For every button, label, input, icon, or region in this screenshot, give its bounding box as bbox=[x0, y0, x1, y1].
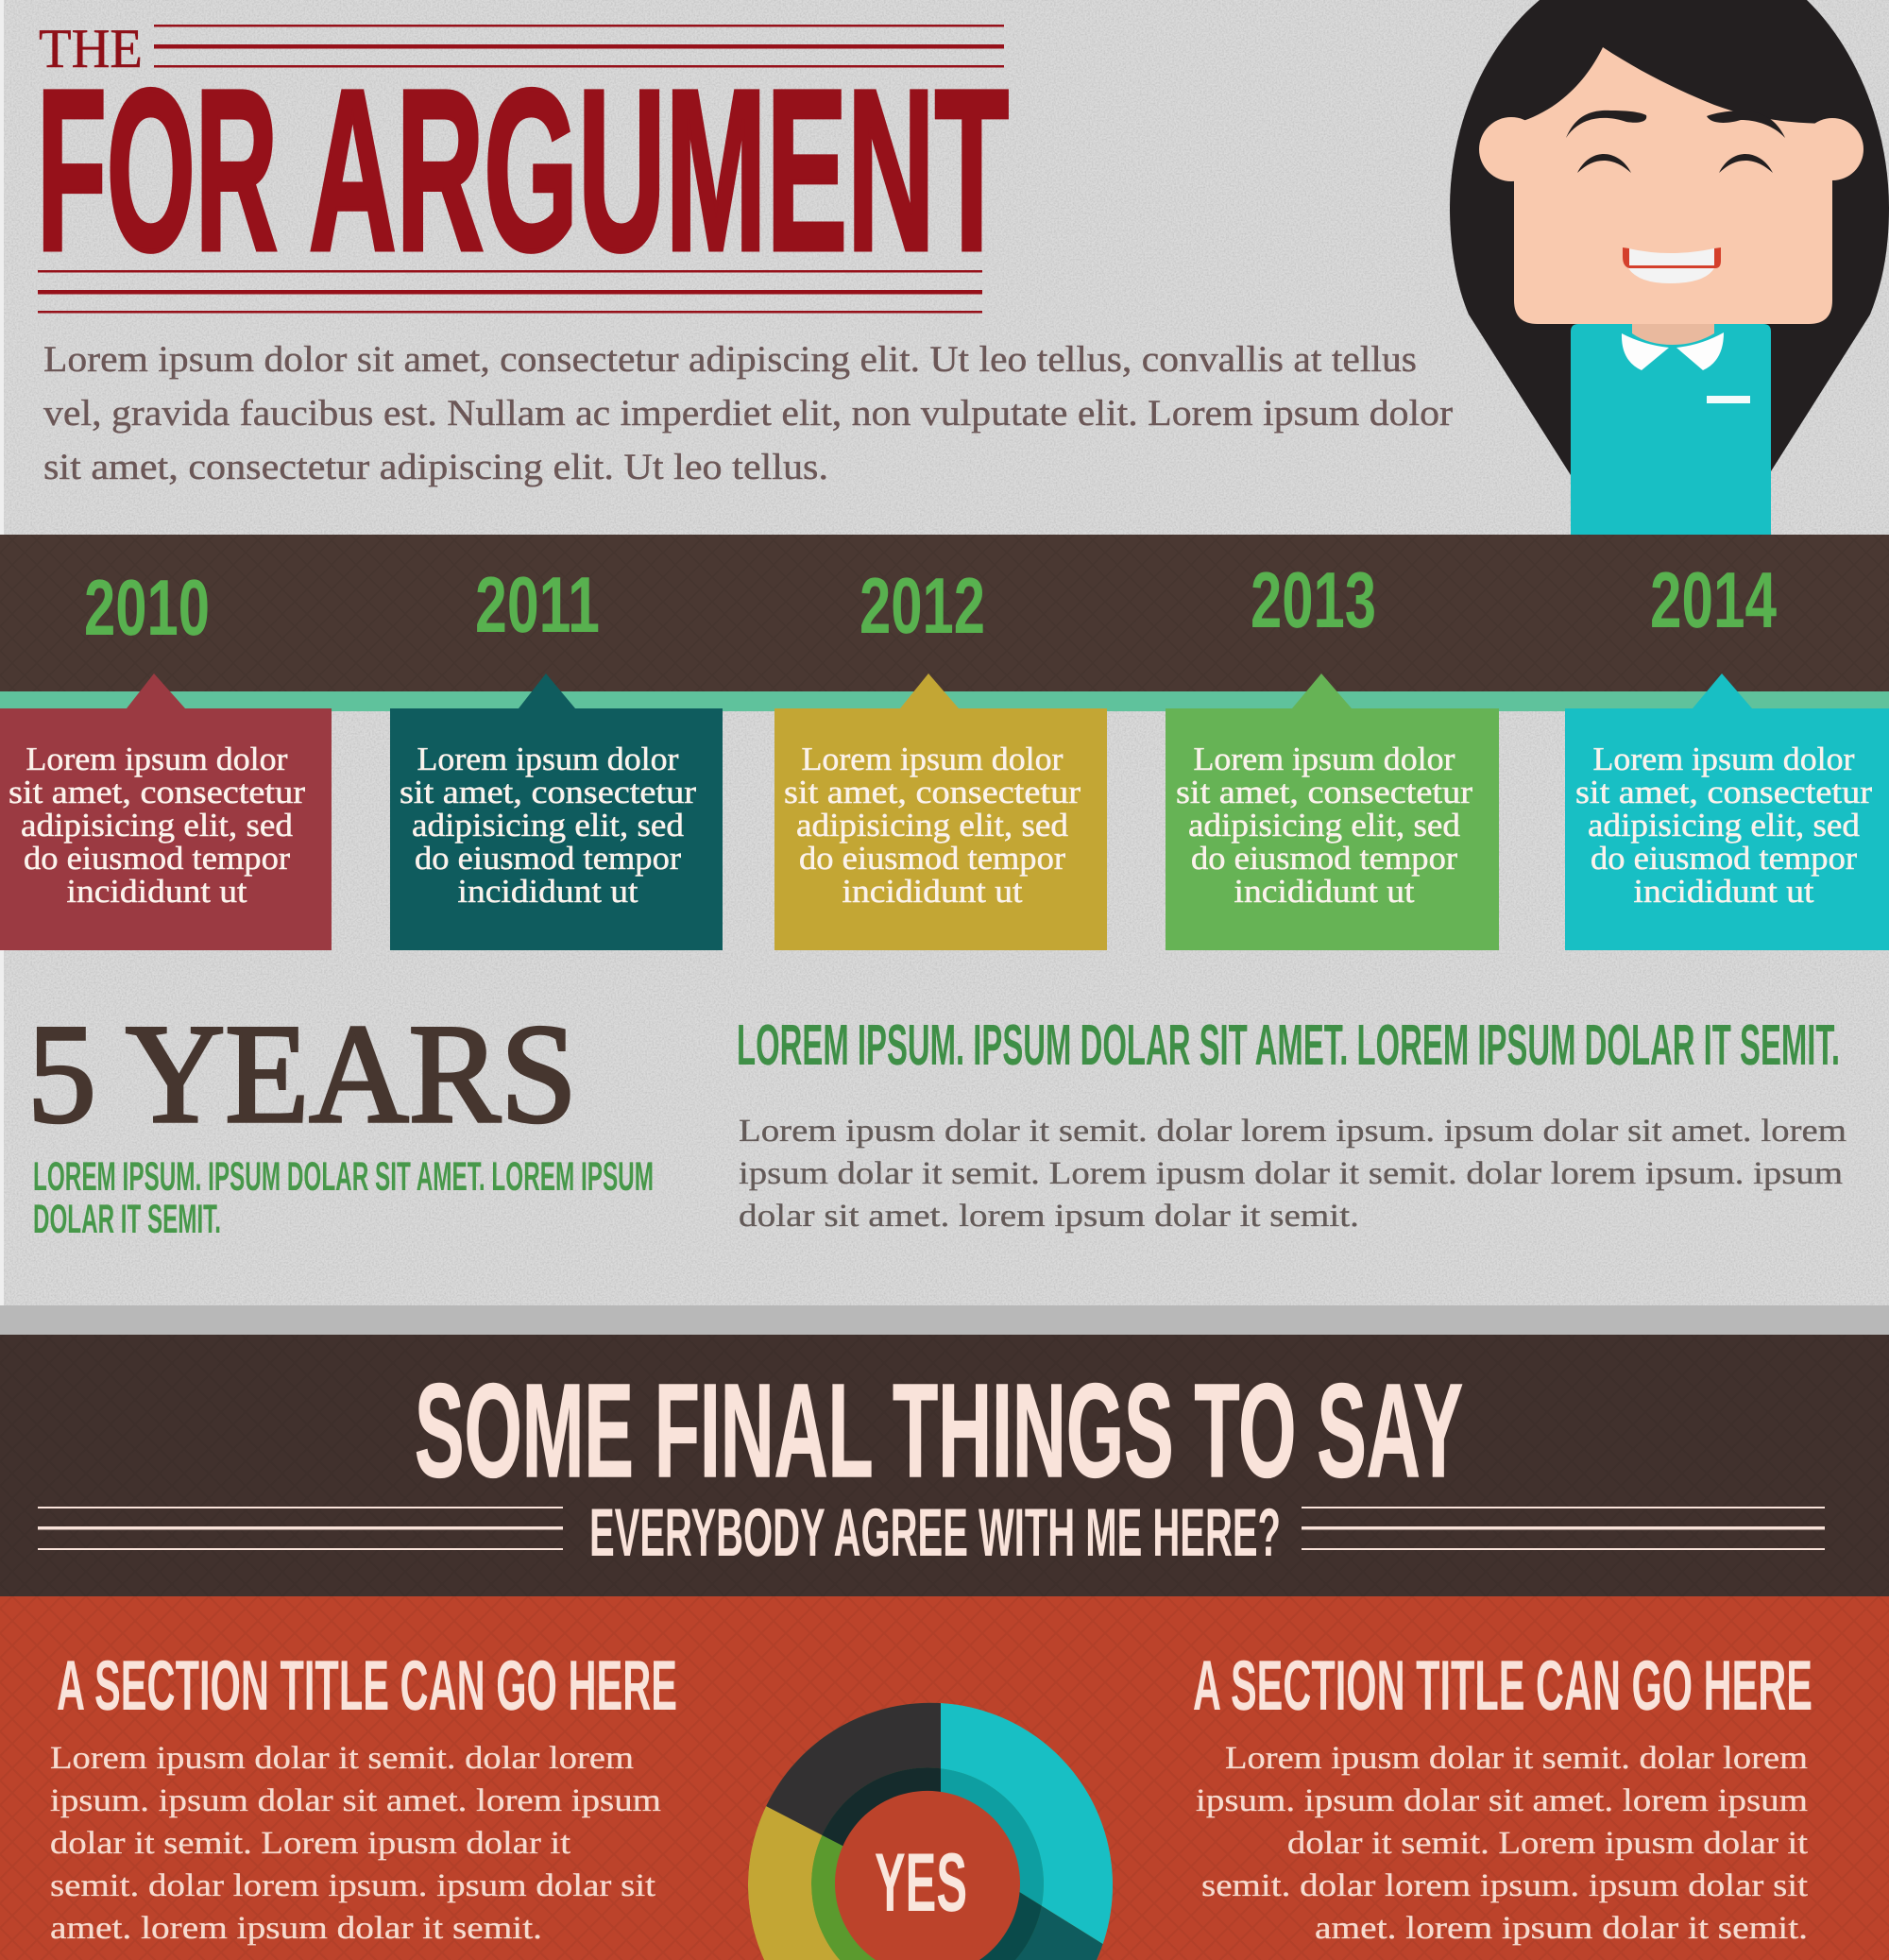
donut outer band bbox=[737, 1696, 1124, 1960]
year labels: 2010 bbox=[84, 563, 210, 652]
left section paragraph: Lorem ipusm dolar it semit. dolar lorem bbox=[50, 1741, 634, 1776]
face bbox=[1514, 47, 1832, 324]
timeline card 2010: incididunt ut bbox=[66, 873, 247, 910]
timeline card 2011: sit amet, consectetur bbox=[400, 774, 696, 810]
timeline card 2010: adipisicing elit, sed bbox=[21, 807, 294, 844]
timeline card 2011: adipisicing elit, sed bbox=[412, 807, 685, 844]
right section paragraph bbox=[1196, 1741, 1809, 1946]
timeline card 2013: do eiusmod tempor bbox=[1191, 840, 1457, 877]
five years stat bbox=[27, 996, 654, 1242]
stat caption bbox=[33, 1154, 654, 1242]
intro paragraph bbox=[43, 339, 1453, 487]
timeline card 2014: do eiusmod tempor bbox=[1591, 840, 1857, 877]
right section bbox=[1193, 1645, 1812, 1946]
title upper rules bbox=[154, 25, 1004, 68]
right section paragraph: semit. dolar lorem ipsum. ipsum dolar sit bbox=[1201, 1868, 1809, 1903]
timeline card 2012: do eiusmod tempor bbox=[799, 840, 1065, 877]
page background bbox=[0, 0, 1889, 1305]
timeline card 2012: Lorem ipsum dolor bbox=[801, 741, 1064, 777]
left section paragraph: amet. lorem ipsum dolar it semit. bbox=[50, 1911, 542, 1946]
collar bbox=[1622, 332, 1724, 370]
timeline card 2012: sit amet, consectetur bbox=[784, 774, 1081, 810]
timeline card 2012: adipisicing elit, sed bbox=[796, 807, 1069, 844]
left section paragraph: ipsum. ipsum dolar sit amet. lorem ipsum bbox=[50, 1783, 661, 1818]
timeline card 2014: Lorem ipsum dolor bbox=[1592, 741, 1855, 777]
bottom red panel bbox=[0, 1596, 1889, 1960]
right section paragraph: Lorem ipusm dolar it semit. dolar lorem bbox=[1225, 1741, 1808, 1776]
title main text bbox=[37, 43, 1009, 298]
banner left rules bbox=[38, 1507, 563, 1550]
hair bbox=[1450, 0, 1889, 475]
timeline card 2010: do eiusmod tempor bbox=[24, 840, 290, 877]
title lower rules bbox=[38, 270, 982, 314]
intro paragraph: vel, gravida faucibus est. Nullam ac imperdiet elit, non vulputate elit. Lorem ipsum dolor bbox=[43, 393, 1453, 434]
left section paragraph: semit. dolar lorem ipsum. ipsum dolar sit bbox=[50, 1868, 656, 1903]
timeline card 2013: Lorem ipsum dolor bbox=[1194, 741, 1455, 777]
timeline card 2013: sit amet, consectetur bbox=[1176, 774, 1472, 810]
stat number: 5 YEARS bbox=[27, 996, 577, 1152]
title word: THE: THE bbox=[39, 17, 143, 79]
timeline card 2013 bbox=[1166, 673, 1499, 950]
timeline card 2013: adipisicing elit, sed bbox=[1188, 807, 1461, 844]
timeline card 2011: incididunt ut bbox=[457, 873, 638, 910]
stat caption: LOREM IPSUM. IPSUM DOLAR SIT AMET. LOREM IPSUM bbox=[33, 1154, 654, 1200]
title main text: ARGUMENT bbox=[309, 43, 1009, 298]
timeline card 2014 bbox=[1565, 673, 1889, 950]
left section bbox=[50, 1645, 677, 1946]
shadow strip bbox=[0, 1305, 1889, 1335]
donut label: YES bbox=[875, 1835, 967, 1929]
timeline card 2010: sit amet, consectetur bbox=[9, 774, 305, 810]
banner subheading: EVERYBODY AGREE WITH ME HERE? bbox=[589, 1495, 1281, 1571]
timeline card 2014: adipisicing elit, sed bbox=[1588, 807, 1861, 844]
year labels: 2014 bbox=[1650, 555, 1777, 644]
timeline card 2011: do eiusmod tempor bbox=[415, 840, 681, 877]
title block bbox=[37, 17, 1009, 314]
year labels: 2011 bbox=[475, 560, 600, 649]
closing banner bbox=[0, 1335, 1889, 1596]
donut hole bbox=[835, 1791, 1020, 1960]
left section paragraph: dolar it semit. Lorem ipusm dolar it bbox=[50, 1826, 571, 1861]
timeline card 2012: incididunt ut bbox=[842, 873, 1023, 910]
intro paragraph: Lorem ipsum dolor sit amet, consectetur adipiscing elit. Ut leo tellus, convallis at tellus bbox=[43, 339, 1417, 380]
timeline card 2010: Lorem ipsum dolor bbox=[26, 741, 288, 777]
left section paragraph bbox=[50, 1741, 661, 1946]
shirt bbox=[1571, 324, 1771, 535]
right paragraph: dolar sit amet. lorem ipsum dolar it semit. bbox=[739, 1199, 1359, 1234]
shirt pocket bbox=[1707, 396, 1750, 403]
timeline card 2013: incididunt ut bbox=[1234, 873, 1415, 910]
character illustration bbox=[1450, 0, 1889, 535]
right section paragraph: ipsum. ipsum dolar sit amet. lorem ipsum bbox=[1196, 1783, 1808, 1818]
donut chart bbox=[737, 1696, 1124, 1960]
right paragraph bbox=[739, 1114, 1846, 1234]
timeline card 2014: incididunt ut bbox=[1634, 873, 1814, 910]
right section paragraph: dolar it semit. Lorem ipusm dolar it bbox=[1287, 1826, 1809, 1861]
banner right rules bbox=[1302, 1507, 1825, 1550]
timeline band bbox=[0, 535, 1889, 711]
timeline card 2012 bbox=[774, 673, 1107, 950]
timeline card 2011 bbox=[390, 673, 723, 950]
year labels bbox=[84, 555, 1777, 652]
stat caption: DOLAR IT SEMIT. bbox=[33, 1197, 221, 1242]
year labels: 2013 bbox=[1251, 555, 1376, 644]
timeline card 2011: Lorem ipsum dolor bbox=[417, 741, 679, 777]
timeline card 2014: sit amet, consectetur bbox=[1575, 774, 1872, 810]
neck bbox=[1632, 324, 1714, 345]
eyebrows bbox=[1566, 111, 1785, 138]
year labels: 2012 bbox=[859, 561, 985, 650]
donut inner band bbox=[811, 1768, 1044, 1960]
right paragraph: Lorem ipusm dolar it semit. dolar lorem ipsum. ipsum dolar sit amet. lorem bbox=[739, 1114, 1846, 1149]
right text block bbox=[737, 1013, 1846, 1234]
timeline card 2010 bbox=[0, 673, 332, 950]
right section paragraph: amet. lorem ipsum dolar it semit. bbox=[1315, 1911, 1808, 1946]
eyes bbox=[1577, 154, 1773, 173]
ears bbox=[1479, 117, 1863, 181]
right paragraph: ipsum dolar it semit. Lorem ipusm dolar it semit. dolar lorem ipsum. ipsum bbox=[739, 1156, 1843, 1191]
intro paragraph: sit amet, consectetur adipiscing elit. Ut leo tellus. bbox=[43, 447, 828, 487]
title main text: FOR bbox=[37, 43, 278, 298]
timeline line bbox=[0, 691, 1889, 711]
mouth bbox=[1623, 247, 1721, 283]
left section title: A SECTION TITLE CAN GO HERE bbox=[57, 1645, 677, 1725]
